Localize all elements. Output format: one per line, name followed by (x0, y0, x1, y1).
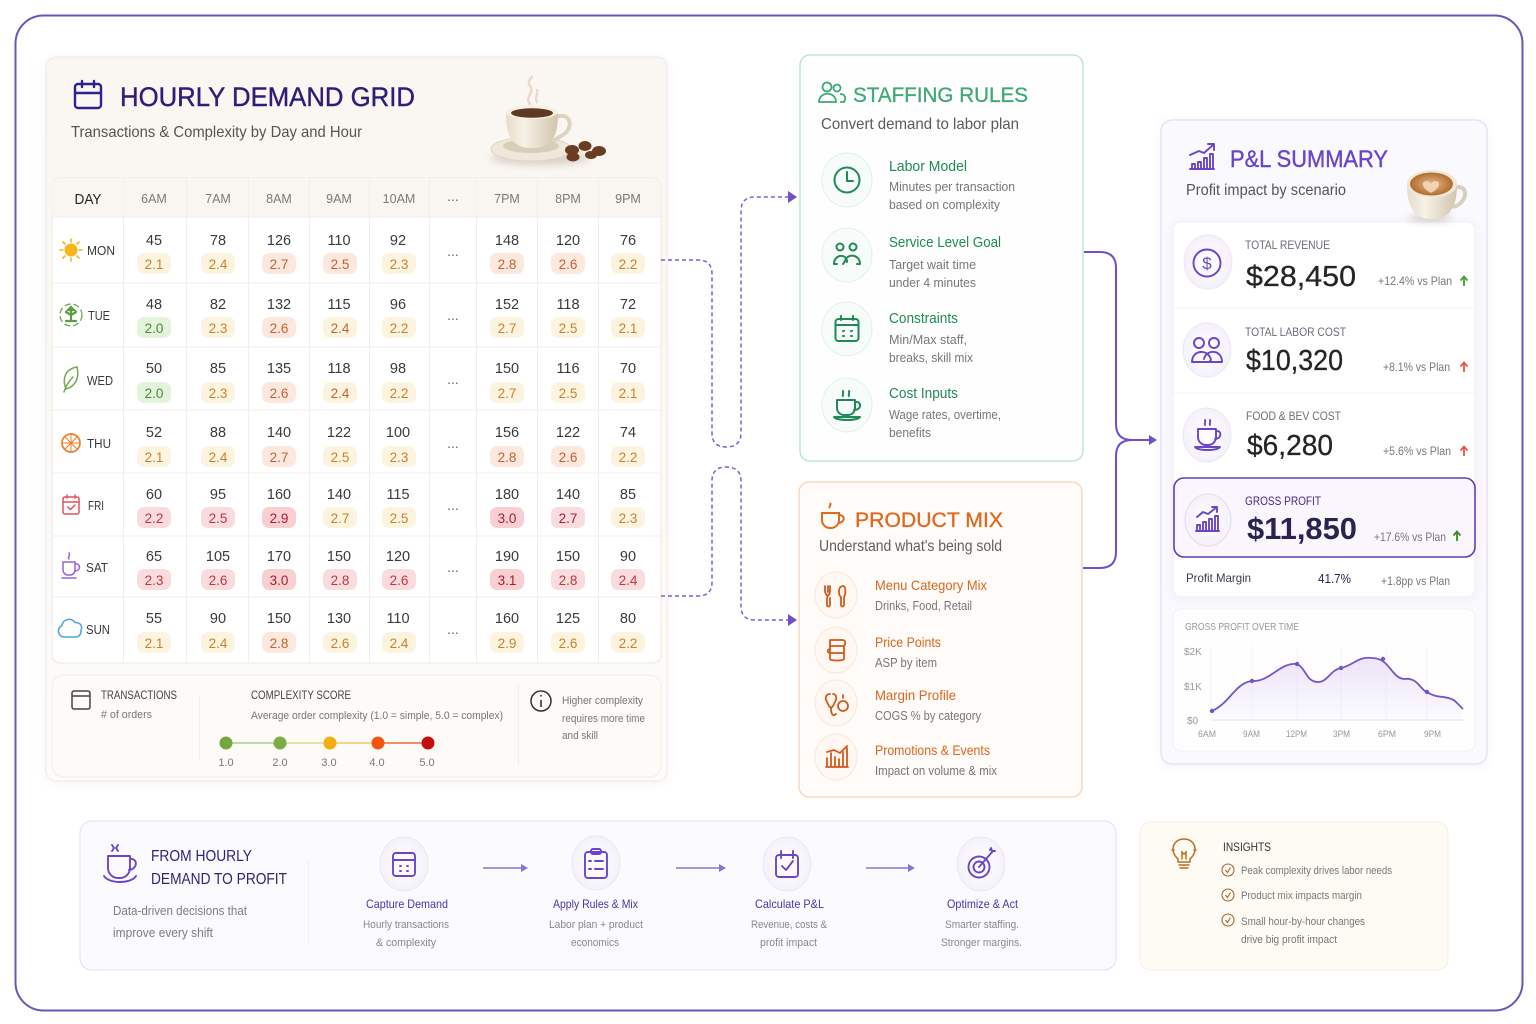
item: cost inputs (822, 378, 1001, 440)
legend: note: requires more time (562, 713, 645, 725)
row: saturday: 3.1 (498, 573, 516, 588)
row: monday: MON (87, 243, 115, 258)
row: monday (60, 233, 645, 274)
row: saturday: 150 (327, 549, 351, 565)
row: monday: 2.7 (270, 257, 288, 272)
KPI: profit margin: +1.8pp vs Plan (1381, 574, 1450, 588)
row: sunday: 2.1 (145, 636, 163, 651)
row: tuesday: 48 (146, 297, 162, 313)
row: monday: 2.3 (390, 257, 408, 272)
item: promotions and events (815, 734, 998, 780)
row: monday: 2.2 (619, 257, 637, 272)
row: wednesday: 50 (146, 361, 162, 377)
row: wednesday: 2.7 (498, 386, 516, 401)
row: wednesday: 2.0 (145, 386, 163, 401)
row: saturday: 190 (495, 549, 519, 565)
arrow: dashed connector to staffing rules (661, 191, 797, 447)
row: tuesday: 2.6 (270, 321, 288, 336)
row: tuesday: 2.2 (390, 321, 408, 336)
description: improve every shift (113, 925, 213, 940)
item: margin profile: Margin Profile (875, 687, 956, 703)
arrow (676, 864, 726, 872)
heading: FROM HOURLY (151, 848, 252, 865)
step: capture demand: & complexity (376, 937, 436, 949)
step: apply rules and mix: Apply Rules & Mix (553, 897, 638, 911)
row: tuesday: TUE (88, 308, 110, 323)
item: labor model (822, 153, 1015, 212)
icon: cup (822, 503, 844, 528)
item: margin profile: COGS % by category (875, 709, 982, 723)
table header row: 8AM (266, 192, 292, 206)
table header row: 10AM (383, 192, 415, 206)
row: thursday: 2.7 (270, 450, 288, 465)
row: tuesday: 2.5 (559, 321, 577, 336)
step: calculate P&L: Revenue, costs & (751, 919, 828, 931)
icon: light bulb (1172, 839, 1196, 868)
row: saturday: 90 (620, 549, 636, 565)
row: sunday: 2.2 (619, 636, 637, 651)
row: monday: 78 (210, 233, 226, 249)
row: monday: 2.5 (331, 257, 349, 272)
row: wednesday: 2.1 (619, 386, 637, 401)
row: friday: 2.7 (331, 511, 349, 526)
row: wednesday: 118 (327, 361, 351, 377)
line chart: gross profit over time: 9PM (1424, 729, 1441, 739)
subtitle: Understand what's being sold (819, 538, 1002, 555)
KPI: total revenue: +12.4% vs Plan (1378, 274, 1452, 288)
heading: hourly demand grid: HOURLY DEMAND GRID (120, 82, 415, 112)
row: friday: FRI (88, 498, 104, 513)
icon: latte cup (1407, 170, 1465, 221)
legend (52, 675, 661, 777)
legend: transactions: TRANSACTIONS (101, 688, 177, 702)
row: wednesday: 2.3 (209, 386, 227, 401)
item: constraints: Constraints (889, 311, 958, 327)
heading (151, 848, 287, 888)
row: saturday: 105 (206, 549, 230, 565)
row: monday: 2.4 (209, 257, 228, 272)
row: tuesday: 72 (620, 297, 636, 313)
item: service level goal: under 4 minutes (889, 276, 976, 290)
row: monday: 2.8 (498, 257, 516, 272)
row: thursday: 140 (267, 425, 291, 441)
insight list: Product mix impacts margin (1241, 890, 1362, 902)
row: tuesday: 2.3 (209, 321, 227, 336)
step: apply rules and mix: Labor plan + product (549, 919, 643, 931)
row: friday: ... (447, 497, 459, 513)
icon: cup (104, 845, 136, 882)
row: thursday: 2.1 (145, 450, 163, 465)
item: constraints: breaks, skill mix (889, 351, 974, 365)
KPI card list (1173, 222, 1475, 597)
table header row: 8PM (555, 192, 581, 206)
row: thursday: 52 (146, 425, 162, 441)
row: saturday: ... (447, 559, 459, 575)
panel: product mix (799, 482, 1082, 797)
row: wednesday: 2.5 (559, 386, 577, 401)
row: wednesday: 135 (267, 361, 291, 377)
insight list (1222, 864, 1392, 946)
row: tuesday: 2.4 (331, 321, 350, 336)
legend: complexity score: COMPLEXITY SCORE (251, 688, 351, 702)
row: sunday: SUN (86, 622, 110, 637)
description (113, 903, 247, 940)
row: wednesday: 2.2 (390, 386, 408, 401)
line chart: gross profit over time: $1K (1184, 682, 1202, 693)
row: thursday: THU (87, 436, 111, 451)
KPI: gross profit highlighted: +17.6% vs Plan (1374, 530, 1446, 544)
row: friday: 180 (495, 487, 519, 503)
row: tuesday: ... (447, 307, 459, 323)
row: wednesday: 98 (390, 361, 406, 377)
row: monday: 148 (495, 233, 519, 249)
row: monday: 2.1 (145, 257, 163, 272)
KPI: gross profit highlighted (1174, 478, 1475, 557)
KPI: gross profit highlighted: $11,850 (1247, 511, 1357, 546)
arrow: dashed connector to product mix (661, 467, 797, 626)
table header row: 7AM (205, 192, 231, 206)
panel: staffing rules (800, 55, 1083, 461)
row: sunday: 130 (327, 611, 351, 627)
row: friday: 95 (210, 487, 226, 503)
row: thursday: 74 (620, 425, 636, 441)
icon: growth chart (1190, 144, 1214, 169)
row: friday (63, 487, 645, 528)
row: sunday: 2.9 (498, 636, 516, 651)
legend: transactions: # of orders (101, 709, 152, 721)
item: labor model: Labor Model (889, 159, 967, 175)
heading: P&L summary: P&L SUMMARY (1230, 146, 1388, 173)
icon: info (531, 691, 551, 711)
step: calculate P&L (751, 837, 828, 949)
row: wednesday: 85 (210, 361, 226, 377)
item: menu category mix (815, 572, 987, 618)
row: saturday: 2.6 (390, 573, 408, 588)
table header row (74, 188, 641, 208)
row: thursday: 122 (327, 425, 351, 441)
table header row: 9AM (326, 192, 352, 206)
arrow (866, 864, 915, 872)
KPI: total labor cost: +8.1% vs Plan (1383, 360, 1450, 374)
panel: insights (1140, 822, 1448, 970)
row: saturday: 65 (146, 549, 162, 565)
row: tuesday: 152 (495, 297, 519, 313)
row: thursday: ... (447, 435, 459, 451)
row: monday: ... (447, 243, 459, 259)
step: capture demand: Hourly transactions (363, 919, 449, 931)
table header row: DAY (74, 191, 102, 208)
row: wednesday: 2.4 (331, 386, 350, 401)
icon: calendar (75, 81, 101, 108)
row: sunday: 90 (210, 611, 226, 627)
row: monday: 45 (146, 233, 162, 249)
row: sunday: 2.4 (390, 636, 409, 651)
line chart: gross profit over time (1173, 609, 1475, 751)
row: friday: 140 (327, 487, 351, 503)
row: thursday: 2.2 (619, 450, 637, 465)
heading: insights: INSIGHTS (1223, 840, 1271, 854)
KPI: profit margin: Profit Margin (1186, 571, 1251, 585)
row: thursday (62, 425, 645, 467)
line chart: gross profit over time: $2K (1184, 647, 1202, 658)
row: thursday: 122 (556, 425, 580, 441)
row: wednesday (64, 361, 645, 403)
table header row: 9PM (615, 192, 641, 206)
KPI: gross profit highlighted: GROSS PROFIT (1245, 494, 1322, 508)
KPI: total labor cost: $10,320 (1246, 345, 1343, 377)
legend: complexity score: 4.0 (369, 757, 385, 769)
row: monday: 92 (390, 233, 406, 249)
legend: complexity score: 2.0 (272, 757, 288, 769)
legend: complexity score: 5.0 (419, 757, 435, 769)
row: friday: 2.3 (619, 511, 637, 526)
row: monday: 76 (620, 233, 636, 249)
KPI: food and bev cost: +5.6% vs Plan (1383, 444, 1451, 458)
KPI: food and bev cost (1183, 408, 1468, 462)
row: tuesday: 96 (390, 297, 406, 313)
heading: DEMAND TO PROFIT (151, 871, 287, 888)
heading: staffing rules: STAFFING RULES (853, 84, 1028, 107)
KPI: total revenue: $ (1202, 254, 1212, 273)
row: saturday: 150 (556, 549, 580, 565)
icon: people (819, 82, 845, 102)
line chart: gross profit over time: GROSS PROFIT OVER TIME (1185, 622, 1299, 633)
item: price points (815, 627, 941, 673)
row: tuesday: 132 (267, 297, 291, 313)
row: sunday (58, 611, 645, 653)
line chart: gross profit over time: 6PM (1378, 729, 1396, 739)
description: Data-driven decisions that (113, 903, 247, 918)
item: service level goal: Service Level Goal (889, 235, 1001, 251)
subtitle: Convert demand to labor plan (821, 116, 1019, 133)
table header row: 6AM (141, 192, 167, 206)
row: sunday: 150 (267, 611, 291, 627)
row: thursday: 2.6 (559, 450, 577, 465)
row: friday: 2.7 (559, 511, 577, 526)
row: tuesday: 82 (210, 297, 226, 313)
step: capture demand (363, 837, 449, 949)
row: sunday: 55 (146, 611, 162, 627)
row: sunday: 125 (556, 611, 580, 627)
item: labor model: Minutes per transaction (889, 180, 1015, 194)
row: saturday: SAT (86, 560, 108, 575)
row: tuesday (60, 297, 645, 338)
row: tuesday: 2.1 (619, 321, 637, 336)
item: constraints: Min/Max staff, (889, 333, 967, 347)
legend: complexity score (218, 688, 503, 769)
icon: coffee cup and beans (490, 77, 606, 165)
row: thursday: 2.8 (498, 450, 516, 465)
row: sunday: 2.6 (331, 636, 349, 651)
row: monday: 110 (327, 233, 351, 249)
row: saturday: 2.3 (145, 573, 163, 588)
item: labor model: based on complexity (889, 198, 1001, 212)
row: saturday: 120 (386, 549, 410, 565)
row: wednesday: 150 (495, 361, 519, 377)
row: tuesday: 2.0 (145, 321, 163, 336)
step: optimize and act: Stronger margins. (941, 937, 1022, 949)
step: optimize and act: Optimize & Act (947, 897, 1019, 911)
row: friday: 140 (556, 487, 580, 503)
row: tuesday: 2.7 (498, 321, 516, 336)
row: wednesday: ... (447, 371, 459, 387)
row: saturday (62, 549, 645, 590)
icon: transactions (72, 691, 90, 709)
legend: note: Higher complexity (562, 695, 643, 707)
row: wednesday: 70 (620, 361, 636, 377)
row: saturday: 2.8 (331, 573, 349, 588)
item: service level goal (822, 228, 1001, 290)
row: friday: 2.2 (145, 511, 163, 526)
line chart: gross profit over time: 6AM (1198, 729, 1216, 739)
row: thursday: 2.4 (209, 450, 228, 465)
row: wednesday: 2.6 (270, 386, 288, 401)
row: friday: 160 (267, 487, 291, 503)
row: tuesday: 115 (327, 297, 351, 313)
subtitle: Profit impact by scenario (1186, 182, 1346, 199)
legend: complexity score: 3.0 (321, 757, 337, 769)
row: monday: 126 (267, 233, 291, 249)
row: friday: 115 (386, 487, 410, 503)
row: wednesday: 116 (556, 361, 580, 377)
row: saturday: 170 (267, 549, 291, 565)
legend: transactions (101, 688, 177, 721)
row: wednesday: WED (87, 373, 113, 388)
step: calculate P&L: profit impact (760, 937, 817, 949)
insight list: Peak complexity drives labor needs (1241, 865, 1392, 877)
step: optimize and act (941, 837, 1022, 949)
item: menu category mix: Menu Category Mix (875, 577, 987, 593)
row: saturday: 2.8 (559, 573, 577, 588)
row: sunday: 2.8 (270, 636, 288, 651)
arrow: solid connector to P&L (1083, 252, 1157, 568)
row: friday: 60 (146, 487, 162, 503)
arrow (483, 864, 528, 872)
KPI: food and bev cost: $6,280 (1247, 430, 1333, 462)
row: sunday: ... (447, 621, 459, 637)
table header row: 7PM (494, 192, 520, 206)
item: menu category mix: Drinks, Food, Retail (875, 599, 972, 613)
row: saturday: 3.0 (270, 573, 288, 588)
row: monday: 2.6 (559, 257, 577, 272)
item: cost inputs: Wage rates, overtime, (889, 408, 1001, 422)
row: sunday: 2.6 (559, 636, 577, 651)
insight list: Small hour-by-hour changes (1241, 916, 1365, 928)
row: saturday: 2.6 (209, 573, 227, 588)
line chart: gross profit over time: $0 (1187, 716, 1199, 727)
heading: product mix: PRODUCT MIX (855, 509, 1003, 532)
KPI: total revenue: TOTAL REVENUE (1245, 238, 1330, 252)
row: thursday: 100 (386, 425, 410, 441)
KPI: profit margin: 41.7% (1318, 571, 1351, 586)
table header row: ... (447, 188, 459, 204)
row: thursday: 156 (495, 425, 519, 441)
panel: from hourly demand to profit (80, 821, 1116, 970)
panel: P&L summary (1161, 120, 1487, 764)
item: price points: Price Points (875, 634, 941, 650)
row: thursday: 2.3 (390, 450, 408, 465)
KPI: profit margin (1186, 571, 1450, 588)
KPI: total labor cost: TOTAL LABOR COST (1245, 325, 1347, 339)
item: cost inputs: benefits (889, 426, 931, 440)
demand table (52, 178, 661, 663)
row: friday: 2.5 (209, 511, 227, 526)
row: friday: 85 (620, 487, 636, 503)
item: margin profile (815, 680, 982, 726)
row: monday: 120 (556, 233, 580, 249)
KPI: total revenue: $28,450 (1246, 261, 1356, 293)
row: sunday: 80 (620, 611, 636, 627)
row: sunday: 2.4 (209, 636, 228, 651)
legend: complexity score: Average order complexity (1.0 = simple, 5.0 = complex) (251, 710, 503, 722)
row: friday: 3.0 (498, 511, 516, 526)
step: capture demand: Capture Demand (366, 897, 448, 911)
step: apply rules and mix: economics (571, 937, 619, 949)
KPI: total labor cost (1183, 323, 1468, 377)
row: thursday: 88 (210, 425, 226, 441)
line chart: gross profit over time: 9AM (1243, 729, 1260, 739)
row: sunday: 110 (386, 611, 410, 627)
line chart: gross profit over time: 12PM (1286, 729, 1307, 739)
row: sunday: 160 (495, 611, 519, 627)
legend: note: and skill (562, 730, 598, 742)
line chart: gross profit over time: 3PM (1333, 729, 1350, 739)
row: tuesday: 118 (556, 297, 580, 313)
item: promotions and events: Promotions & Events (875, 742, 990, 758)
insight list: drive big profit impact (1241, 934, 1337, 946)
KPI: food and bev cost: FOOD & BEV COST (1246, 409, 1342, 423)
legend: note (562, 695, 645, 742)
row: friday: 2.5 (390, 511, 408, 526)
item: service level goal: Target wait time (889, 258, 976, 272)
item: promotions and events: Impact on volume & mix (875, 764, 998, 778)
row: thursday: 2.5 (331, 450, 349, 465)
row: friday: 2.9 (270, 511, 288, 526)
item: cost inputs: Cost Inputs (889, 386, 958, 402)
step: optimize and act: Smarter staffing. (945, 919, 1019, 931)
subtitle: Transactions & Complexity by Day and Hour (71, 124, 363, 141)
step: calculate P&L: Calculate P&L (755, 897, 824, 911)
KPI: total revenue (1184, 235, 1468, 293)
item: constraints (822, 302, 974, 365)
row: saturday: 2.4 (619, 573, 638, 588)
item: price points: ASP by item (875, 656, 937, 670)
legend: complexity score: 1.0 (218, 757, 234, 769)
step: apply rules and mix (549, 836, 643, 949)
